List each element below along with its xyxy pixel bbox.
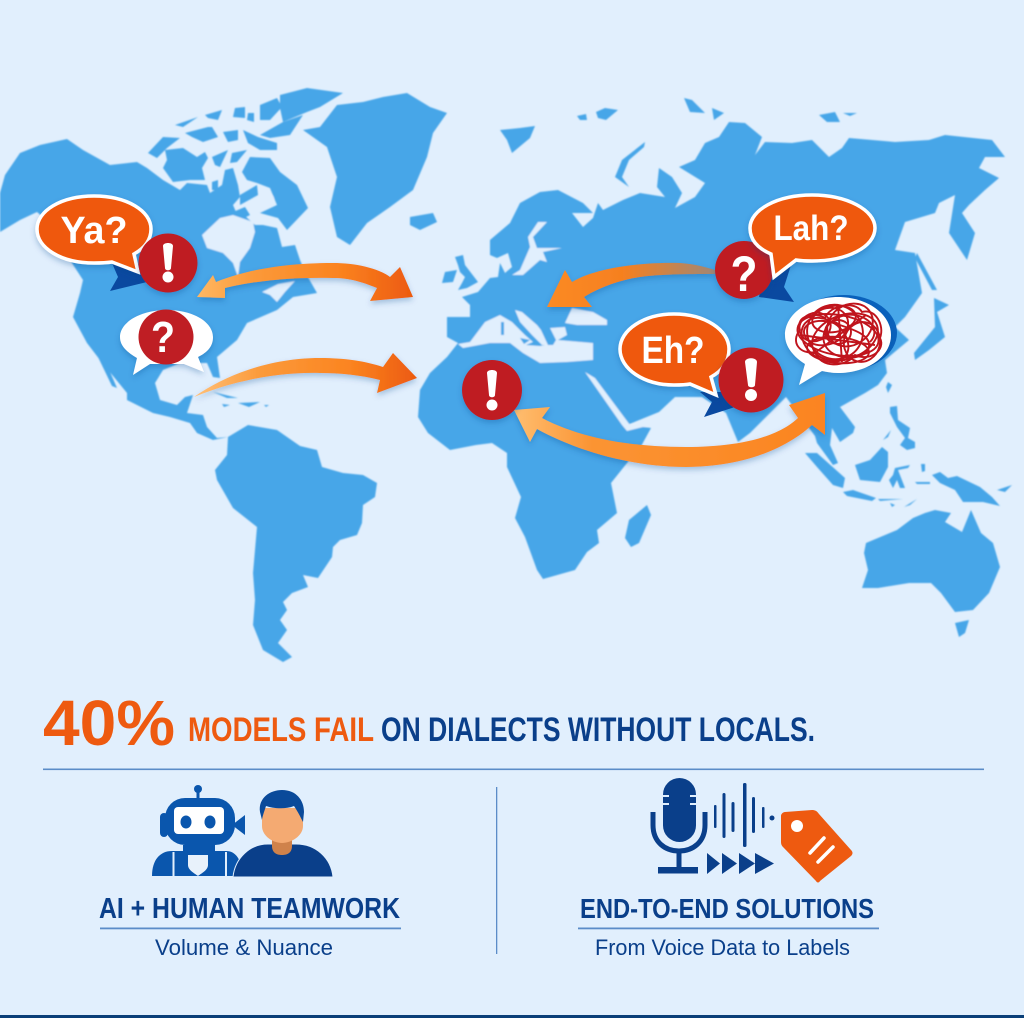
- word: Lah?: [774, 209, 848, 248]
- arrow: North America to Europe, double headed: [197, 263, 413, 301]
- icon: microphone: [653, 778, 705, 874]
- continent: North America: [0, 139, 317, 440]
- panel heading: END-TO-END SOLUTIONS: [580, 893, 874, 924]
- islands: Arctic Eurasia: [500, 98, 857, 187]
- blue phrase: ON DIALECTS WITHOUT LOCALS.: [381, 711, 815, 749]
- world map: [0, 88, 1012, 662]
- islands: Japan: [914, 253, 949, 360]
- alert badge: West Africa: [462, 360, 522, 420]
- vertical divider: [496, 787, 497, 954]
- heading underline: [578, 928, 879, 929]
- callout: Lah? speech bubble with question: [715, 195, 875, 302]
- continents: Eurasia and Africa: [418, 122, 1005, 579]
- orange phrase: MODELS FAIL: [188, 711, 374, 749]
- alert badge: [718, 348, 784, 412]
- panel heading: AI + HUMAN TEAMWORK: [99, 893, 400, 925]
- question badge: [715, 241, 773, 302]
- number: 40%: [43, 687, 175, 759]
- scribble: [793, 295, 885, 371]
- arrow: Africa to Southeast Asia, double headed: [514, 393, 825, 467]
- Adriatic Sea: [515, 310, 548, 345]
- inland seas: [202, 195, 651, 431]
- tail shadow: [110, 263, 150, 291]
- icon: orange tag: [781, 810, 852, 882]
- icon: robot: [152, 785, 245, 876]
- icon: sound wave: [714, 783, 774, 847]
- question mark: ?: [151, 313, 175, 362]
- panel subtitle: Volume & Nuance: [155, 935, 333, 960]
- Red Sea: [585, 372, 651, 431]
- tail shadow: [700, 392, 735, 417]
- bubble shadow: [791, 295, 897, 371]
- panel: AI + human teamwork: [99, 785, 401, 960]
- icon: forward arrows: [707, 853, 774, 874]
- icon: person: [233, 790, 333, 877]
- tail shadow: [759, 262, 794, 302]
- headline statistic: [43, 687, 815, 759]
- island: Baja California: [98, 357, 117, 388]
- horizontal divider: [43, 768, 984, 770]
- question badge: ?: [730, 246, 758, 302]
- arrow: Gulf to West Africa: [194, 353, 417, 397]
- Black Sea: [565, 308, 607, 325]
- callout: Ya? speech bubble with alert: [37, 196, 198, 292]
- Baltic Sea: [512, 222, 562, 275]
- Mediterranean islands: [501, 322, 530, 344]
- island: Tasmania: [955, 620, 969, 637]
- Mediterranean Sea: [458, 315, 593, 363]
- bubble: [620, 314, 729, 395]
- callout: tangled scribble bubble: [785, 295, 897, 385]
- panel subtitle: From Voice Data to Labels: [595, 935, 850, 960]
- island: Greenland: [303, 93, 447, 245]
- islands: Britain and Ireland: [442, 255, 478, 290]
- footer bar: [0, 1015, 1024, 1018]
- question badge: [138, 310, 194, 364]
- panel: end-to-end solutions: [578, 778, 879, 960]
- bubble: [37, 196, 151, 272]
- heading underline: [100, 928, 401, 929]
- continent: South America: [215, 425, 377, 662]
- islands: Caribbean: [213, 392, 269, 407]
- continent: Australia: [862, 510, 1000, 612]
- arrow: Asia to Europe: [547, 263, 715, 307]
- islands: Canadian Arctic: [148, 88, 343, 230]
- bubble: [750, 195, 875, 277]
- bubble: [785, 297, 891, 385]
- island: Iceland: [410, 213, 437, 230]
- callout: Eh? speech bubble with alert: [620, 314, 784, 417]
- Gulf of St Lawrence: [262, 281, 295, 302]
- Lake on Baffin Island: [266, 195, 274, 201]
- word: Eh?: [642, 330, 704, 372]
- land masses: [0, 88, 1012, 662]
- islands: Southeast Asia: [805, 382, 1012, 507]
- bubble: [120, 310, 213, 375]
- callout: white question bubble: [120, 310, 213, 375]
- Hudson Bay: [202, 215, 255, 277]
- island: Madagascar: [625, 505, 651, 547]
- alert badge: [138, 234, 198, 292]
- word: Ya?: [60, 210, 128, 252]
